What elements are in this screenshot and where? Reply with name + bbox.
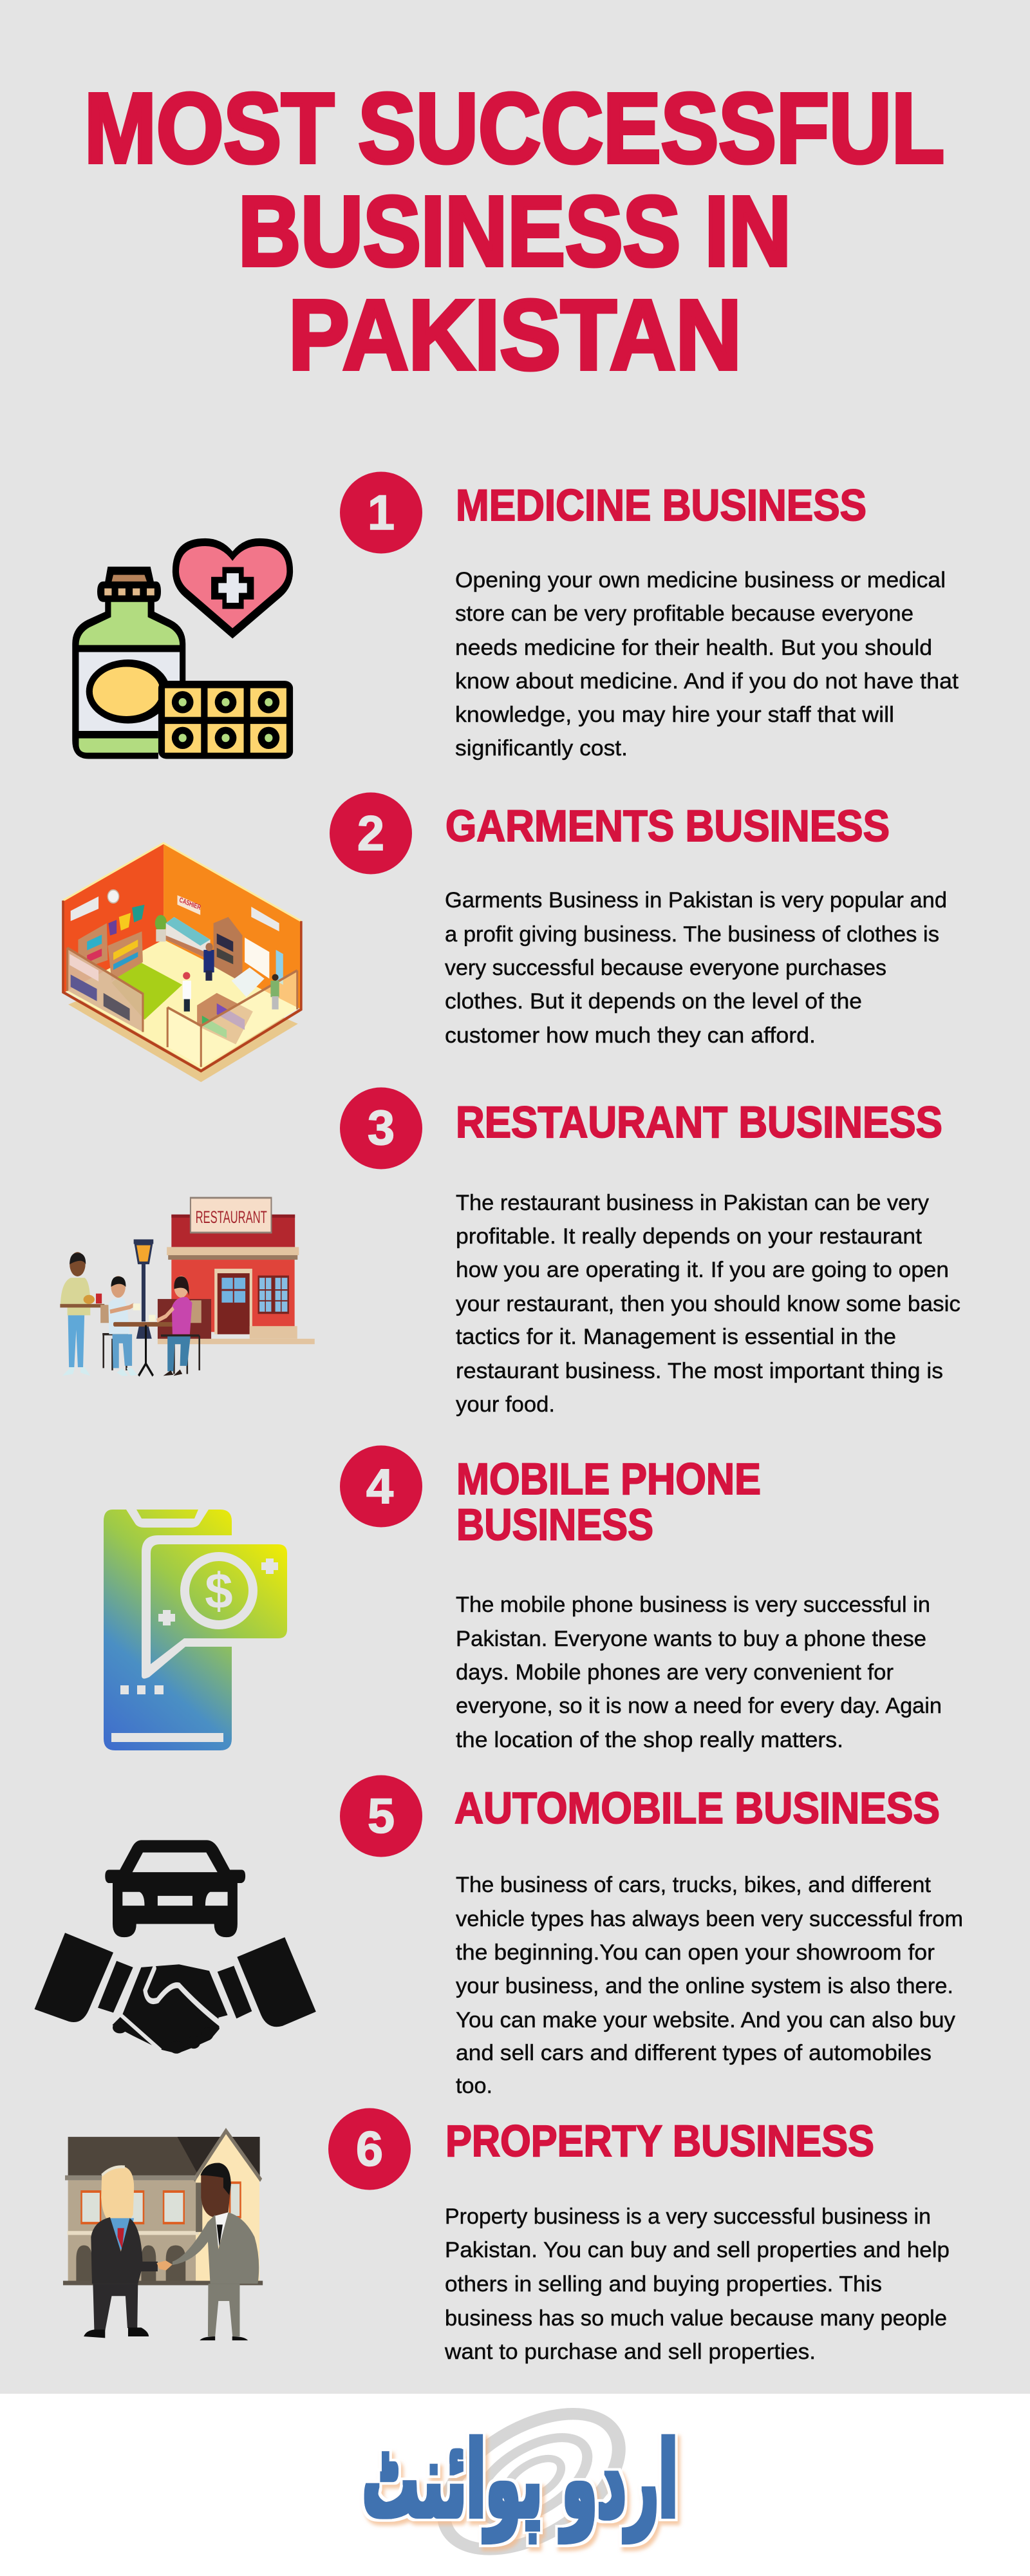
- icon: phone with money message: [104, 1510, 287, 1750]
- text block: mobile phone: Pakistan. Everyone wants to buy a phone these: [456, 1627, 926, 1651]
- text block: mobile phone: [456, 1593, 942, 1752]
- text block: restaurant: how you are operating it. If you are going to open: [456, 1258, 949, 1282]
- text block: medicine: needs medicine for their health. But you should: [455, 636, 932, 660]
- text block: automobile: The business of cars, trucks, bikes, and different: [456, 1873, 932, 1897]
- icon: isometric garment shop: CASHIER: [178, 896, 201, 912]
- text block: medicine: significantly cost.: [455, 736, 628, 761]
- businessman left: [84, 2166, 158, 2338]
- heading: automobile business: AUTOMOBILE BUSINESS: [454, 1783, 940, 1833]
- number badge 5: [340, 1775, 422, 1857]
- text block: restaurant: your restaurant, then you should know some basic: [456, 1292, 960, 1316]
- text block: restaurant: [456, 1191, 960, 1417]
- icon: phone with money message: $: [205, 1562, 233, 1619]
- text block: automobile: your business, and the online system is also there.: [456, 1974, 953, 1998]
- heading: restaurant business: RESTAURANT BUSINESS: [456, 1097, 942, 1147]
- heading: property business: PROPERTY BUSINESS: [445, 2116, 874, 2166]
- number badge 6: 6: [356, 2122, 383, 2177]
- icon: isometric garment shop: [63, 843, 301, 1082]
- footer logo: UrduPoint: [362, 2387, 678, 2576]
- number badge 2: [330, 792, 412, 875]
- text block: medicine: [455, 568, 959, 761]
- logo swirl: [415, 2387, 647, 2576]
- text block: garments: a profit giving business. The business of clothes is: [445, 922, 939, 947]
- heading: mobile phone business: [456, 1454, 761, 1549]
- text block: medicine: knowledge, you may hire your staff that will: [455, 703, 894, 727]
- panel: restaurant business: [60, 1087, 960, 1417]
- panel: garments business: [63, 792, 947, 1082]
- text block: property: want to purchase and sell properties.: [444, 2340, 816, 2364]
- text block: garments: clothes. But it depends on the level of the: [445, 989, 862, 1014]
- text block: automobile: [456, 1873, 963, 2098]
- number badge 6: [328, 2108, 411, 2190]
- text block: garments: very successful because everyone purchases: [445, 956, 886, 980]
- text block: medicine: Opening your own medicine business or medical: [455, 568, 946, 592]
- text block: property: Property business is a very successful business in: [445, 2204, 931, 2229]
- text block: restaurant: The restaurant business in Pakistan can be very: [456, 1191, 929, 1215]
- panel: mobile phone business: [104, 1445, 942, 1752]
- text block: property: others in selling and buying properties. This: [445, 2272, 882, 2297]
- text block: medicine: store can be very profitable because everyone: [455, 601, 913, 626]
- title: BUSINESS IN: [238, 176, 791, 287]
- text block: mobile phone: days. Mobile phones are very convenient for: [456, 1660, 894, 1685]
- text block: property: Pakistan. You can buy and sell properties and help: [445, 2238, 950, 2262]
- text block: garments: customer how much they can afford.: [445, 1023, 816, 1048]
- footer band: [0, 2394, 1030, 2576]
- panel: property business: [63, 2108, 950, 2364]
- text block: garments: Garments Business in Pakistan is very popular and: [445, 888, 947, 913]
- number badge 1: [340, 471, 422, 554]
- icon: car and handshake: [35, 1840, 316, 2054]
- text block: automobile: vehicle types has always been very successful from: [456, 1907, 963, 1931]
- number badge 4: 4: [366, 1459, 393, 1514]
- number badge 1: 1: [368, 486, 395, 540]
- text block: restaurant: restaurant business. The most important thing is: [456, 1359, 943, 1383]
- icon: medicine bottle, heart and pills: [72, 538, 293, 759]
- waiter: [60, 1252, 104, 1376]
- logo wordmark: اردو پوائنٹ: [362, 2418, 678, 2543]
- icon: restaurant with people: RESTAURANT: [196, 1208, 267, 1227]
- text block: property: [444, 2204, 950, 2364]
- title: PAKISTAN: [288, 279, 742, 390]
- seated woman: [157, 1276, 200, 1376]
- seated man: [100, 1276, 137, 1376]
- text block: restaurant: tactics for it. Management is essential in the: [456, 1325, 896, 1349]
- number badge 2: 2: [357, 806, 384, 861]
- number badge 4: [340, 1445, 422, 1528]
- text block: automobile: the beginning.You can open your showroom for: [456, 1940, 935, 1965]
- number badge 5: 5: [368, 1789, 395, 1844]
- heading: medicine business: MEDICINE BUSINESS: [456, 480, 866, 530]
- text block: garments: [445, 888, 947, 1048]
- icon: restaurant with people: [60, 1198, 315, 1376]
- text block: automobile: and sell cars and different types of automobiles: [456, 2041, 932, 2065]
- title: [84, 73, 944, 390]
- panel: automobile business: [35, 1775, 963, 2098]
- icon: two businessmen in front of a house: [63, 2131, 263, 2340]
- text block: mobile phone: the location of the shop really matters.: [456, 1728, 843, 1752]
- text block: mobile phone: everyone, so it is now a need for every day. Again: [456, 1694, 942, 1718]
- number badge 3: [340, 1087, 422, 1170]
- text block: automobile: too.: [456, 2074, 492, 2098]
- businessman right: [173, 2163, 259, 2340]
- text block: property: business has so much value because many people: [445, 2306, 947, 2331]
- cafe table: [113, 1303, 178, 1376]
- text block: mobile phone: The mobile phone business is very successful in: [456, 1593, 930, 1617]
- text block: medicine: know about medicine. And if you do not have that: [455, 669, 959, 694]
- text block: restaurant: profitable. It really depends on your restaurant: [456, 1224, 922, 1249]
- heading: garments business: GARMENTS BUSINESS: [445, 801, 890, 851]
- text block: restaurant: your food.: [456, 1392, 555, 1417]
- heading: mobile phone business: MOBILE PHONE: [456, 1454, 761, 1504]
- text block: automobile: You can make your website. And you can also buy: [456, 2008, 955, 2032]
- number badge 3: 3: [368, 1101, 395, 1155]
- panel: medicine business: [72, 471, 959, 761]
- heading: mobile phone business: BUSINESS: [456, 1500, 653, 1549]
